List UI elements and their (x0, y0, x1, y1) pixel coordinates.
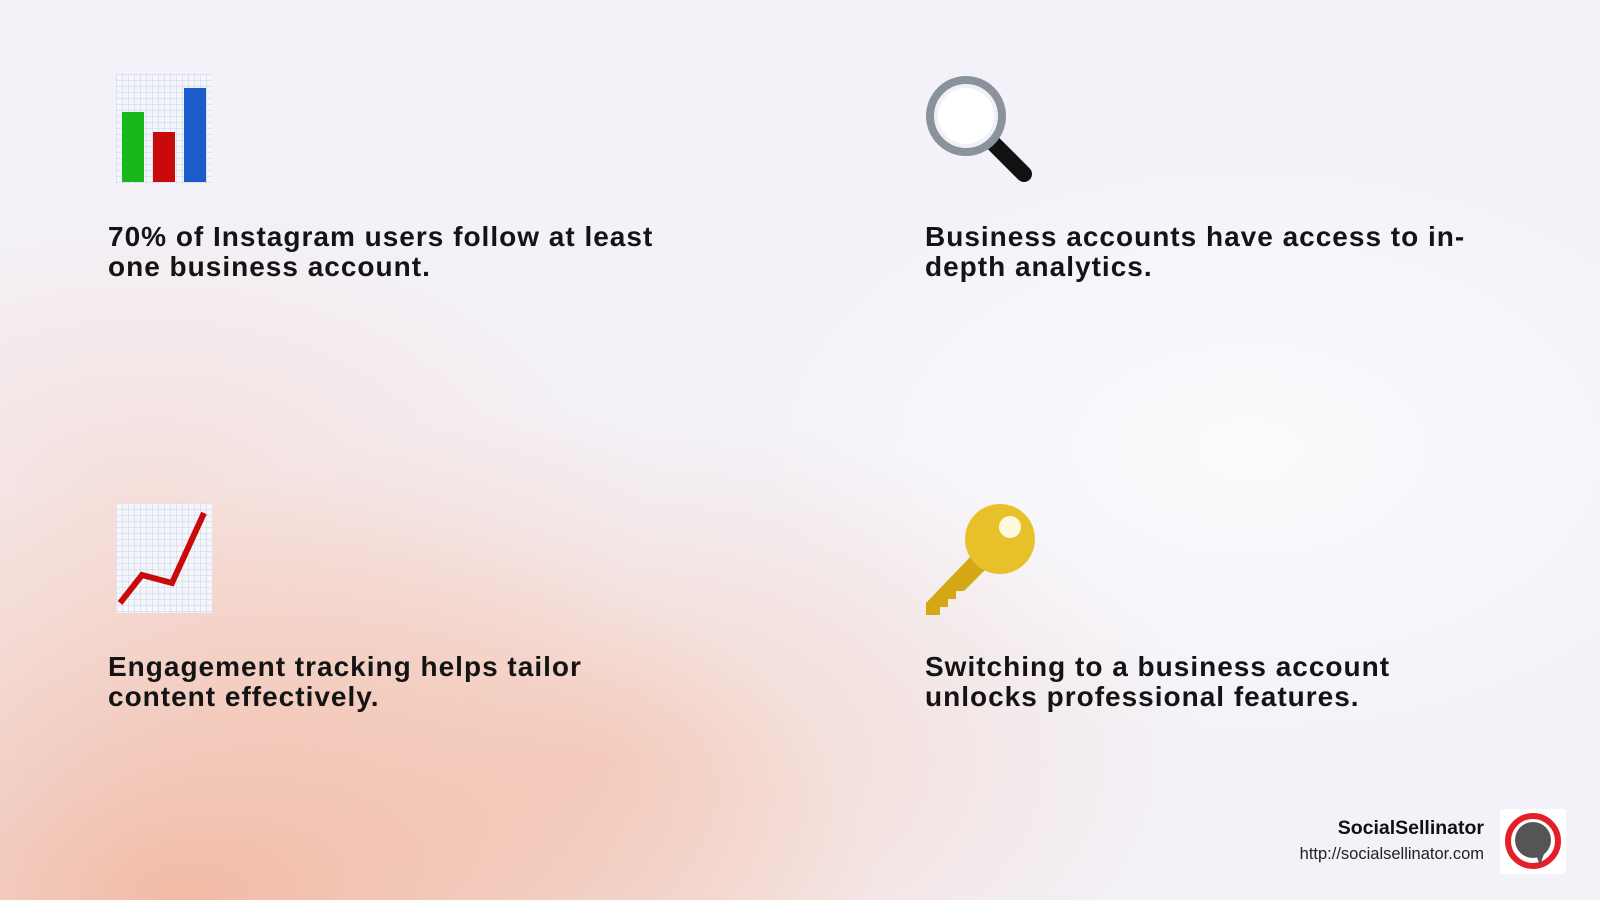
text: stat 4 (925, 651, 1390, 712)
text: stat 2: Business accounts have access to in- (925, 221, 1465, 252)
text: stat 3: Engagement tracking helps tailor (108, 651, 582, 682)
text: stat 2 (925, 221, 1465, 282)
icon: chart increasing (116, 503, 212, 613)
brand url: http://socialsellinator.com (1300, 845, 1484, 863)
icon: magnifier (926, 76, 1032, 182)
text: stat 3: content effectively. (108, 681, 380, 712)
text: stat 4: unlocks professional features. (925, 681, 1360, 712)
icon: key (926, 504, 1035, 615)
text: stat 1: one business account. (108, 251, 431, 282)
logo (1500, 809, 1566, 874)
text: stat 4: Switching to a business account (925, 651, 1390, 682)
text: stat 3 (108, 651, 582, 712)
text: stat 1 (108, 221, 653, 282)
text: stat 1: 70% of Instagram users follow at least (108, 221, 653, 252)
text: stat 2: depth analytics. (925, 251, 1153, 282)
brand name: SocialSellinator (1338, 817, 1484, 839)
icon: bar chart (116, 74, 212, 184)
